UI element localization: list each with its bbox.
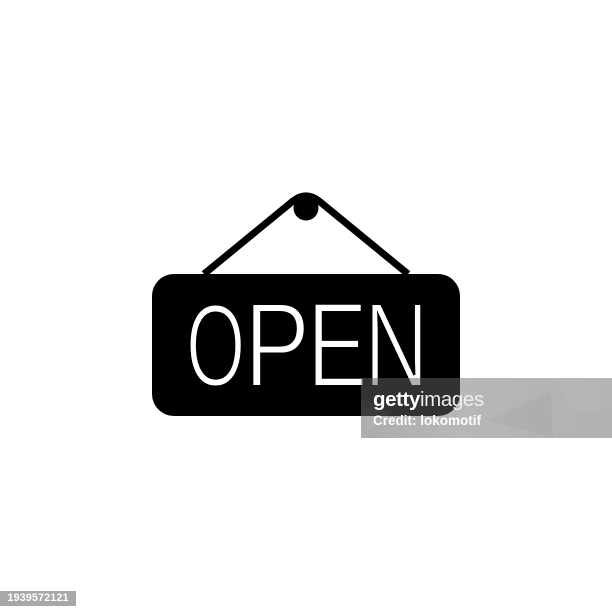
watermark credit: Credit: lokomotif — [373, 413, 481, 428]
watermark logo: gettyimages — [373, 388, 484, 411]
sign text: OPEN: E — [307, 277, 368, 413]
hanger cord — [204, 196, 408, 274]
sign text: OPEN: O — [186, 279, 245, 411]
image id tag — [0, 591, 76, 606]
watermark texture — [361, 378, 612, 438]
sign text: OPEN — [186, 277, 429, 413]
image id tag: 1939572121 — [7, 592, 69, 604]
sign text: OPEN: P — [244, 278, 310, 413]
sign board — [152, 274, 460, 416]
nail — [294, 196, 318, 220]
watermark panel — [361, 378, 612, 438]
sign text: OPEN: N — [364, 277, 429, 413]
